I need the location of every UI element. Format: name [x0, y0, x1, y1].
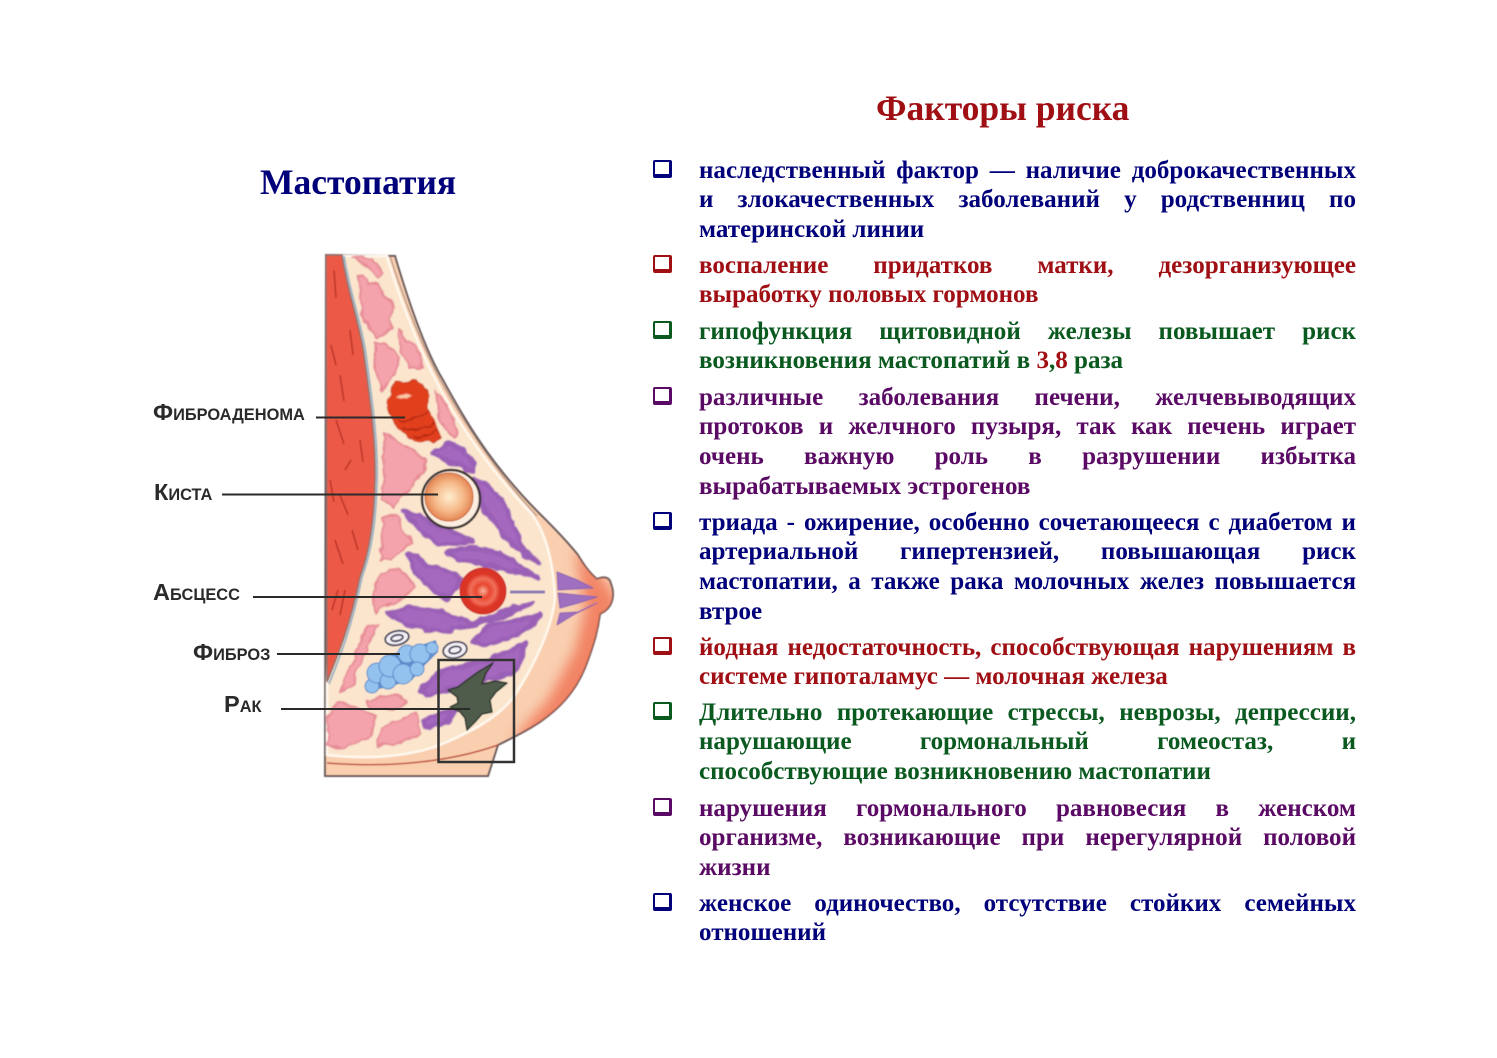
risk factor 7: stress: [653, 698, 1356, 785]
risk factor 2: inflammation: [653, 252, 1356, 308]
risk factor 5: triad: втрое: [699, 598, 762, 625]
label: Киста: КИСТА: [154, 479, 212, 505]
risk factor 5: triad: артериальной гипертензией, повышающая риск: [699, 538, 1356, 565]
risk factor 1: heredity: наследственный фактор — наличие доброкачественных: [699, 156, 1356, 184]
risk factor 9: loneliness: [653, 890, 1356, 946]
breast inner tissue: [327, 256, 555, 757]
title: Факторы риска: Факторы риска: [876, 88, 1129, 128]
cancer tumour: [448, 663, 507, 730]
label: Фиброаденома: ФИБРОАДЕНОМА: [153, 399, 305, 425]
fibrosis cluster: [365, 629, 468, 693]
purple glandular lobes: [388, 443, 540, 727]
pectoral muscle: [326, 255, 375, 682]
risk factor 5: triad: мастопатии, а также рака молочных желез повышается: [699, 568, 1356, 595]
risk factor 9: loneliness: отношений: [699, 919, 826, 946]
risk factor 8: hormonal balance: жизни: [699, 854, 771, 881]
title: Мастопатия: Мастопатия: [260, 162, 456, 202]
risk factor 2: inflammation: воспаление придатков матки, дезорганизующее: [699, 252, 1356, 278]
label: Абсцесс: АБСЦЕСС: [153, 579, 240, 605]
risk factor 1: heredity: материнской линии: [699, 216, 924, 243]
skin shading along the edge: [510, 548, 618, 742]
risk factor 8: hormonal balance: организме, возникающие при нерегулярной половой: [699, 824, 1356, 851]
leader lines: [222, 418, 482, 709]
risk factor 3: thyroid: гипофункция щитовидной железы повышает риск: [699, 318, 1356, 344]
risk factor 6: iodine: системе гипоталамус — молочная железа: [699, 663, 1168, 690]
nipple ducts: [557, 572, 597, 625]
fibroadenoma lesion: [387, 380, 440, 443]
risk factor 4: liver: очень важную роль в разрушении избытка: [699, 443, 1356, 470]
risk factor 3: thyroid: [653, 318, 1356, 374]
risk factor 7: stress: способствующие возникновению мастопатии: [699, 758, 1211, 785]
risk factor 9: loneliness: женское одиночество, отсутствие стойких семейных: [699, 890, 1356, 916]
risk factor 8: hormonal balance: нарушения гормонального равновесия в женском: [699, 794, 1356, 822]
label: Рак: РАК: [224, 691, 262, 717]
abscess lesion: [460, 568, 506, 614]
risk factor 4: liver: протоков и желчного пузыря, так как печень играет: [699, 413, 1356, 440]
risk factor 5: triad: [653, 508, 1356, 625]
risk factor 6: iodine: йодная недостаточность, способствующая нарушениям в: [699, 634, 1356, 660]
risk factor 7: stress: Длительно протекающие стрессы, неврозы, депрессии,: [699, 698, 1356, 726]
risk factor 1: heredity: и злокачественных заболеваний у родственниц по: [699, 186, 1356, 213]
label: Фиброз: ФИБРОЗ: [193, 639, 270, 665]
risk factor 6: iodine: [653, 634, 1356, 690]
pink fat lobes: [328, 257, 458, 748]
risk factor 3: thyroid: возникновения мастопатий в 3,8 раза: [699, 347, 1123, 374]
risk factor 8: hormonal balance: [653, 794, 1356, 881]
risk factor 5: triad: триада - ожирение, особенно сочетающееся с диабетом и: [699, 508, 1356, 536]
risk factor 4: liver: [653, 384, 1356, 500]
risk factor 1: heredity: [653, 156, 1356, 243]
cyst lesion: [422, 470, 480, 528]
anatomical illustration: [222, 253, 615, 778]
highlighted box around cancer: [438, 660, 514, 762]
risk factor 2: inflammation: выработку половых гормонов: [699, 281, 1038, 308]
breast outline and skin: [325, 255, 613, 776]
risk factor 4: liver: вырабатываемых эстрогенов: [699, 473, 1030, 500]
risk factor 7: stress: нарушающие гормональный гомеостаз, и: [699, 728, 1356, 755]
risk factor 4: liver: различные заболевания печени, желчевыводящих: [699, 384, 1356, 410]
